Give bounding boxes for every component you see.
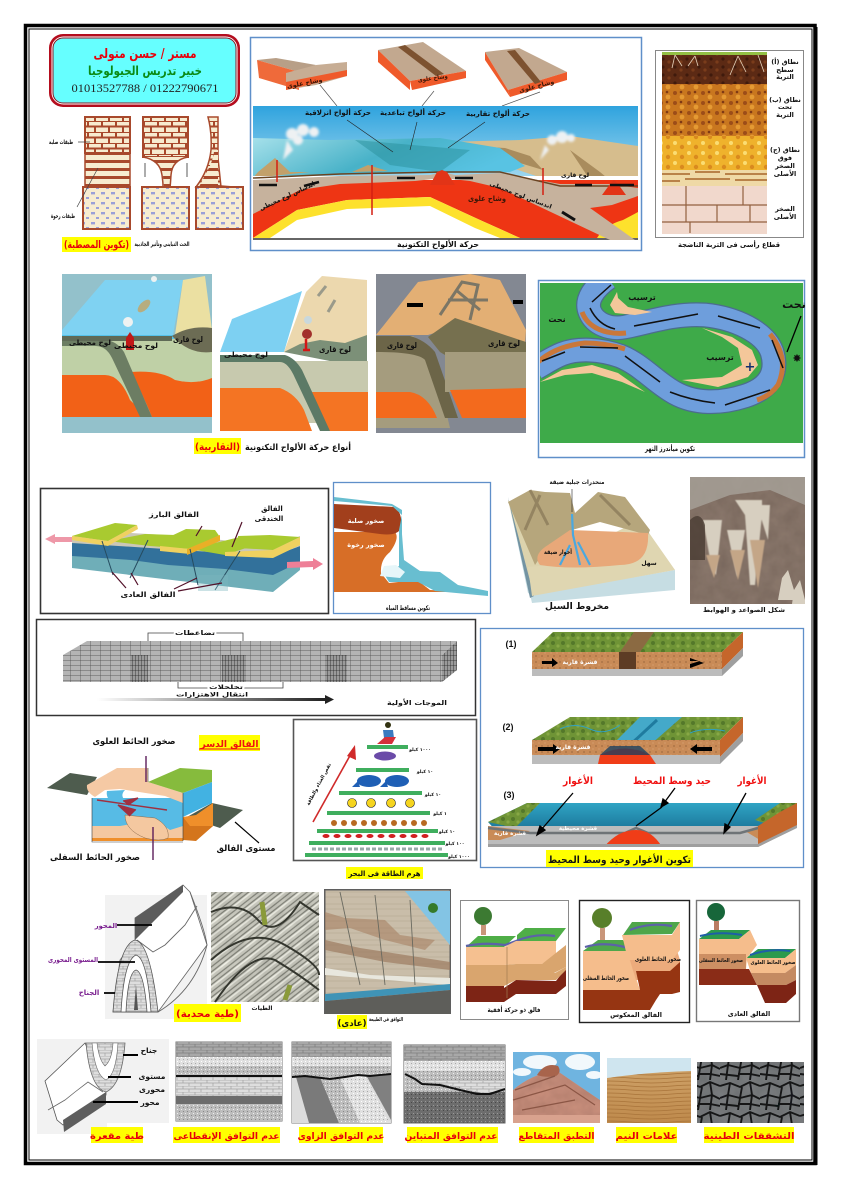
- step 1 number: (1): [506, 639, 517, 649]
- block: [699, 930, 796, 958]
- icons: yellow organisms: [348, 798, 414, 808]
- labels: energy values: ١٠ كيلو: [424, 792, 441, 798]
- sand bars: [540, 292, 758, 392]
- panel: waterfall: [334, 482, 490, 614]
- panel: angular unconformity: [292, 1042, 391, 1123]
- caption: syncline: [90, 1127, 144, 1143]
- photo: road-cut fault: [324, 889, 451, 1014]
- cross section diagram: اندساس لوح محيطى: [488, 181, 553, 211]
- caption: syncline: طية مقعرة: [90, 1131, 144, 1142]
- panel: ocean-ocean convergence: لوح محيطى: [114, 341, 158, 350]
- label: fault plane: مستوى الفالق: [216, 844, 276, 854]
- eruption clouds: [283, 124, 575, 160]
- caption: nonconformity: عدم التوافق المتباين: [404, 1132, 498, 1142]
- labels: soil horizons: نطاق (ب): [769, 96, 801, 104]
- fault plane stripes: [47, 773, 243, 828]
- panel: ocean-ocean convergence: [62, 274, 212, 433]
- panel: normal fault blocks: [40, 488, 328, 614]
- arrow: lower wall pointer: [152, 827, 154, 860]
- fold body: [45, 1043, 106, 1125]
- caption: ripple marks: علامات النيم: [616, 1132, 678, 1142]
- plate motion arrows: [259, 178, 634, 186]
- panel: alluvial fan: أخوار ضيقة: [544, 548, 572, 556]
- cross section diagram: حركة ألواح تباعدية: [380, 108, 446, 117]
- label: compressions: تضاغطات: [175, 629, 215, 637]
- label: trench left: الأغوار: [562, 774, 593, 787]
- compression bracket: [148, 633, 243, 641]
- labels: منحدرات جبلية ضيقة: [550, 479, 605, 486]
- panel: syncline diagram: [37, 1039, 169, 1134]
- caption: folds: الطيات: [252, 1005, 272, 1012]
- rock column 3: [196, 117, 243, 229]
- caption: anticline: (طية محدبة): [176, 1009, 239, 1020]
- label: rarefactions: تخلخلات: [209, 684, 243, 691]
- soft rock: [334, 532, 477, 592]
- panel: river meander: نحت: [548, 315, 566, 324]
- caption: trenches and ridge: [546, 850, 693, 867]
- convergent block: [485, 48, 567, 97]
- author role: خبير تدريس الجيولوجيا: [88, 63, 202, 78]
- caption: meander: تكوين ميأندرز النهر: [644, 444, 695, 453]
- panel: waterfall: صخور رخوة: [347, 541, 385, 549]
- caption: cross bedding: [518, 1127, 594, 1143]
- caption: strike-slip: فالق ذو حركة أفقية: [488, 1005, 540, 1014]
- panel: cave stalactites photo: [690, 477, 805, 614]
- panel: anticline diagram: [48, 885, 207, 1019]
- label: mid-ocean ridge: حيد وسط المحيط: [633, 776, 711, 787]
- panel: continent-continent convergence: [376, 274, 526, 433]
- label: energy amount: نقص الغذاء والطاقة: [305, 762, 333, 807]
- arrow: energy direction: [313, 745, 356, 822]
- panel: river meander: نحت: [782, 298, 806, 311]
- label: upper wall: صخور الحائط العلوى: [92, 737, 176, 747]
- labels: soil horizons: الأصلى: [774, 212, 796, 221]
- caption: convergent plate types: [194, 438, 351, 454]
- block body: [87, 768, 213, 842]
- arrows: pointers: [537, 788, 746, 835]
- labels: soil horizons: فوق: [778, 154, 792, 162]
- tree: [474, 907, 492, 935]
- labels: soil horizons: تحت: [778, 103, 792, 111]
- soil layers: [662, 52, 767, 234]
- label: trench right: الأغوار: [737, 774, 766, 787]
- cross section diagram: وشاح علوى: [468, 194, 506, 203]
- labels: soil horizons: [769, 57, 801, 221]
- caption: angular unconformity: عدم التوافق الزاوى: [298, 1132, 384, 1142]
- icons: small brown organisms: [331, 820, 427, 826]
- axis surface: [63, 1092, 106, 1132]
- author name: مستر / حسن متولى: [94, 47, 196, 62]
- labels: الفالق البارز: [148, 511, 199, 519]
- panel: strike-slip fault: [460, 900, 568, 1020]
- arches: [86, 1043, 125, 1092]
- panel: ocean-continent convergence: لوح محيطى: [224, 351, 268, 359]
- plain: [508, 500, 675, 596]
- panel: normal fault: صخور الحائط العلوى: [750, 960, 796, 966]
- continental land: [445, 136, 638, 190]
- mantle and white core: [253, 176, 638, 238]
- labels: soil horizons: الصخر: [774, 162, 795, 170]
- tree: [592, 908, 612, 942]
- caption: energy pyramid: [346, 867, 423, 879]
- caption: trenches and ridge: تكوين الأغوار وحيد وسط المحيط: [548, 853, 691, 866]
- hard rock: [334, 504, 401, 534]
- panel: river meander: ترسيب: [706, 353, 734, 362]
- wave block: [63, 641, 457, 682]
- labels: soil horizons: الأصلى: [774, 169, 796, 178]
- icon: girl on top: [377, 722, 396, 744]
- panel: normal fault blocks: الفالق: [261, 505, 283, 513]
- panel: soil profile: [656, 50, 804, 249]
- step 2 number: (2): [502, 722, 514, 732]
- panel: ocean-ocean convergence: لوح محيطى: [69, 339, 111, 347]
- panel: river meander: [536, 278, 806, 458]
- icon: blue fish: [352, 775, 409, 787]
- labels: soil horizons: نطاق (ج): [770, 146, 800, 154]
- label: axial plane: المستوى المحورى: [48, 956, 98, 964]
- panel: syncline diagram: مستوى: [139, 1072, 166, 1081]
- caption: angular unconformity: [298, 1127, 384, 1143]
- panel: river meander: +: [745, 360, 755, 375]
- axis plane: [135, 885, 183, 940]
- labels: soil horizons: التربة: [776, 111, 794, 119]
- arrow: fault plane pointer: [235, 822, 259, 843]
- cross section diagram: لوح قارى: [561, 172, 589, 179]
- flow arrows: [542, 285, 783, 405]
- panel: continent-continent convergence: لوح قارى: [387, 341, 417, 350]
- caption: mesa formation: [62, 237, 190, 252]
- label: axis: المحور: [94, 922, 117, 930]
- labels: energy values: ١٠٠٠ كيلو: [408, 747, 431, 753]
- rock column 1: [83, 117, 130, 229]
- arches: [113, 940, 158, 1012]
- cross section diagram: حركة ألواح تقاربية: [466, 109, 530, 118]
- labels: صخور صلبة: [348, 517, 384, 525]
- step 3 block: قشرة قارية: [494, 831, 526, 837]
- caption: P waves: الموجات الأولية: [387, 698, 447, 707]
- panel: thrust fault: [47, 735, 276, 863]
- caption: soil profile: قطاع رأسى فى التربة الناضجة: [678, 240, 780, 249]
- arrow: upper wall pointer: [145, 756, 147, 782]
- caption: mud cracks: التشققات الطينية: [704, 1132, 794, 1142]
- caption: normal fault in nature: التوافق فى الطبيعة: [369, 1017, 403, 1023]
- panel: reverse fault: [580, 900, 690, 1022]
- labels: soil horizons: سطح: [776, 66, 794, 74]
- caption: ripple marks: [616, 1127, 678, 1143]
- labels: ترسيب: [628, 293, 656, 302]
- step 3 block: قشرة محيطية: [559, 826, 598, 832]
- labels: soil horizons: الصخر: [774, 205, 795, 213]
- labels: جناح: [141, 1046, 157, 1055]
- caption: normal fault in nature: [337, 1015, 403, 1029]
- panel: mesa formation diagram: [49, 117, 243, 229]
- arrow: wave direction: [97, 695, 334, 704]
- caption: disconformity: [173, 1127, 280, 1143]
- transform block: وشاح علوى: [286, 76, 323, 90]
- water: [334, 497, 488, 596]
- label: soft layers: طبقات رخوة: [51, 213, 75, 220]
- panel: normal fault: [696, 900, 800, 1022]
- labels: energy values: ١٠ كيلو: [416, 769, 433, 775]
- title: thrust fault: الفالق الدسر: [200, 739, 258, 750]
- tree: [707, 903, 725, 930]
- caption: alluvial fan: مخروط السيل: [545, 602, 609, 612]
- step 1 block: قشرة قارية: [563, 659, 598, 666]
- panel: continent-continent convergence: لوح قارى: [488, 339, 520, 348]
- block bands: [72, 523, 300, 592]
- divergent block: [378, 42, 466, 90]
- labels: energy values: ١ كيلو: [432, 811, 447, 817]
- labels: energy values: ١٠ كيلو: [438, 829, 455, 835]
- caption: anticline: [174, 1004, 241, 1022]
- phone numbers: 01013527788 / 01222790671: [72, 83, 219, 95]
- photo: sand ripples: [607, 1058, 691, 1123]
- panel: ocean-continent convergence: لوح قارى: [319, 345, 351, 354]
- caption: nonconformity: [404, 1127, 498, 1143]
- panel: disconformity: [176, 1042, 282, 1121]
- caption: disconformity: عدم التوافق الإنقطاعى: [174, 1132, 280, 1142]
- panel: reverse fault: صخور الحائط السفلى: [583, 976, 629, 982]
- leader lines: [93, 1055, 138, 1102]
- panel: ocean energy pyramid: [294, 720, 476, 860]
- caption: waterfall: تكوين مساقط المياه: [386, 604, 430, 612]
- caption: convergent plate types: (التقاربية): [195, 442, 240, 453]
- volcanic islands left: [253, 158, 388, 178]
- caption: normal fault in nature: (عادى): [338, 1019, 367, 1029]
- author header box: [49, 34, 240, 107]
- caption: cross bedding: التطبق المتقاطع: [518, 1132, 594, 1142]
- block: [466, 928, 566, 947]
- cross section diagram: [253, 106, 638, 240]
- photo: folded strata: [211, 892, 319, 1002]
- cross section diagram: اندساس لوح محيطى: [258, 180, 316, 212]
- labels: energy values: [408, 747, 470, 860]
- outline: [48, 1082, 103, 1110]
- labels: energy values: ١٠٠ كيلو: [445, 841, 464, 847]
- mountains: [508, 490, 650, 565]
- leader lines: [98, 925, 152, 993]
- plankton row: [312, 848, 442, 850]
- panel: syncline diagram: محورى: [139, 1085, 165, 1094]
- panel: nonconformity: [404, 1045, 505, 1123]
- labels: soil horizons: التربة: [776, 73, 794, 81]
- transform block: [257, 58, 347, 90]
- panel: river meander: ✸: [792, 352, 802, 365]
- panel: ocean-continent convergence: [220, 276, 368, 432]
- rock column 2: [141, 117, 190, 229]
- step 1 block: [532, 632, 743, 676]
- convergent block: وشاح علوى: [518, 78, 555, 95]
- photo: cross bedding rock: [513, 1052, 602, 1123]
- caption: plate tectonics: حركة الألواح التكتونية: [397, 239, 479, 249]
- panel: rift to mid-ocean ridge: [480, 628, 804, 868]
- labels: soil horizons: نطاق (أ): [771, 57, 799, 66]
- caption: mesa formation: (تكوين المصطبة): [64, 239, 129, 251]
- labels: حركة ألواح انزلاقية: [305, 108, 371, 117]
- fan: [537, 530, 648, 568]
- divergent block: وشاح علوى: [417, 73, 448, 84]
- step 2 block: قشرة قارية: [556, 744, 591, 751]
- outline curve: [137, 892, 207, 1012]
- icon: purple fish: [374, 752, 396, 760]
- step 3 block: [488, 803, 797, 847]
- caption: mud cracks: [704, 1127, 794, 1143]
- labels: صخور الحائط العلوى: [635, 957, 681, 963]
- erosion bands: [582, 312, 626, 333]
- fold body: [113, 885, 207, 1012]
- panel: P waves: [36, 620, 476, 716]
- caption: convergent plate types: أنواع حركة الألواح التكتونية: [245, 441, 351, 453]
- tension arrows: [45, 534, 72, 544]
- panel: plate tectonics: [250, 38, 642, 250]
- labels: energy values: ١٠٠٠ كيلو: [447, 854, 470, 860]
- title: thrust fault: [199, 735, 260, 751]
- panel: syncline diagram: محور: [139, 1098, 160, 1107]
- ocean: [253, 138, 525, 176]
- panel: normal fault blocks: الخندقى: [255, 515, 283, 523]
- panel: ocean-ocean convergence: لوح قارى: [173, 335, 203, 344]
- caption: mesa formation: الحت التباينى وتأثير الجاذبية: [134, 240, 190, 248]
- crust: [253, 172, 638, 240]
- labels: صخور الحائط السفلى: [699, 958, 743, 964]
- step 2 block: [532, 717, 743, 764]
- caption: energy pyramid: هرم الطاقة فى البحر: [348, 869, 420, 878]
- rarefaction bracket: [178, 682, 283, 688]
- block: [583, 922, 680, 951]
- platforms: [305, 745, 448, 857]
- caption: stalagmites: شكل الصواعد و الهوابط: [703, 606, 785, 614]
- panel: alluvial fan: [508, 479, 675, 612]
- photo: mud cracks: [697, 1062, 804, 1123]
- caption: reverse fault: الفالق المعكوس: [610, 1011, 662, 1019]
- river channel: [536, 278, 782, 402]
- panel: alluvial fan: سهل: [641, 560, 657, 567]
- label: limb: الجناح: [79, 989, 99, 997]
- label: hard layers: طبقات صلبة: [49, 139, 73, 146]
- step 3 number: (3): [504, 790, 515, 800]
- panel: normal fault blocks: الفالق العادى: [120, 591, 176, 599]
- label: lower wall: صخور الحائط السفلى: [50, 853, 140, 863]
- icons: red shrimp: [322, 834, 428, 838]
- caption: normal fault: الفالق العادى: [728, 1010, 770, 1018]
- label: vibration transfer: انتقال الاهتزازات: [176, 692, 248, 698]
